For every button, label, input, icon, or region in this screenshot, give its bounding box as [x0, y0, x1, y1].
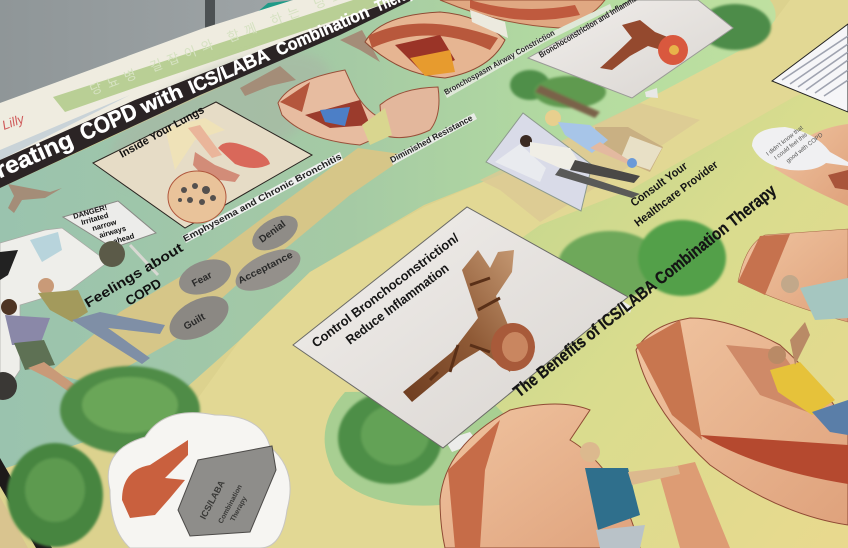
- lung: top right: [774, 124, 848, 206]
- icon: doctor standing: [520, 135, 640, 198]
- title text: [0, 0, 424, 189]
- speech bubble: good with COPD: [786, 132, 825, 165]
- woman: [1, 299, 82, 394]
- danger sign: ahead: [112, 231, 136, 246]
- tree: behind top sign, right: [699, 4, 771, 50]
- icon: airway tube: [403, 250, 535, 402]
- danger sign: [63, 201, 158, 275]
- sign: inside your lungs: [93, 102, 312, 228]
- lung: right middle with man: [738, 229, 848, 322]
- speech bubble: I didn't know that: [766, 125, 805, 158]
- danger sign: airways: [98, 224, 127, 240]
- title banner: [0, 0, 424, 189]
- rock: guilt: Guilt: [182, 311, 208, 333]
- title text: ICS/LABA: [186, 45, 273, 99]
- sign heading: Control Bronchoconstriction/: [309, 230, 462, 350]
- icon: padlock: [178, 446, 276, 536]
- speech bubble: I could feel this: [774, 132, 809, 162]
- caption: consult your healthcare provider: Consult Your: [629, 160, 690, 209]
- icon: padlock: Therapy: [230, 496, 249, 523]
- sign heading: Reduce Inflammation: [343, 260, 452, 347]
- rock: fear: [174, 253, 236, 301]
- sofa: [595, 127, 663, 172]
- caption: bronchospasm airway constriction: [443, 4, 612, 98]
- trees: bushes right of big sign: [558, 220, 726, 299]
- trees: bottom left: [7, 366, 200, 547]
- logo: Lilly: Lilly: [0, 111, 27, 133]
- ground: meadow around big sign: [325, 390, 520, 506]
- sign: bronchoconstriction and inflammation: [528, 0, 733, 98]
- lungs: upper cluster with bands: [365, 0, 605, 78]
- icon: patient on sofa: [545, 110, 637, 168]
- lungs: diminished resistance cluster: [278, 70, 439, 145]
- sign heading: Inside Your Lungs: [118, 104, 206, 161]
- caption: bronchospasm airway constriction: Bronchospasm Airway Constriction: [443, 28, 556, 97]
- big sign: control bronchoconstriction: [293, 207, 632, 452]
- icon: person in yellow shirt: [768, 322, 848, 435]
- lung: large right: [636, 318, 848, 525]
- rock: guilt: [162, 287, 236, 349]
- icon: coiled airway: [122, 440, 188, 518]
- man: [38, 278, 165, 364]
- rocks: stages of feelings: [162, 208, 306, 349]
- speech bubble: [752, 125, 848, 170]
- icon: padlock: ICS/LABA: [198, 478, 227, 521]
- text panel: top right: [772, 24, 848, 112]
- danger sign: DANGER!: [72, 203, 108, 221]
- ground: lower right meadow: [470, 75, 848, 548]
- tree: behind top sign, left: [510, 70, 606, 118]
- rock: acceptance: Acceptance: [236, 250, 295, 287]
- danger sign: Irritated: [80, 210, 110, 227]
- title text: with: [136, 81, 186, 119]
- rock: denial: [246, 208, 304, 258]
- van: [0, 228, 125, 400]
- ground: upper teal and green meadow: [0, 0, 776, 470]
- poster header strip: [0, 0, 410, 165]
- feelings about copd heading: COPD: [123, 275, 164, 309]
- sign: consult your healthcare provider: [486, 110, 663, 211]
- rock: acceptance: [230, 241, 306, 299]
- airway illustration: [600, 20, 688, 70]
- rock: fear: Fear: [190, 270, 214, 290]
- title text: COPD: [76, 98, 141, 146]
- danger sign: narrow: [91, 217, 118, 233]
- caption: emphysema and chronic bronchitis: Emphysema and Chronic Bronchitis: [181, 151, 343, 244]
- lung illustration: [168, 125, 270, 223]
- tree: bush left of big sign: [338, 392, 442, 484]
- bottom-left poster corner: [0, 458, 52, 548]
- icon: person in teal vest: [580, 442, 680, 548]
- rock: denial: Denial: [257, 219, 288, 245]
- title text: Combination: [273, 2, 372, 60]
- lung: large bottom: [440, 404, 730, 548]
- tree trunks: upper left: [8, 30, 380, 213]
- caption: consult your healthcare provider: Healthcare Provider: [633, 159, 721, 229]
- callout: ics/laba lock cloud: [108, 413, 290, 548]
- icon: padlock: Combination: [218, 484, 244, 525]
- people: couple by the van: [1, 278, 165, 394]
- caption: diminished resistance: Diminished Resistance: [388, 113, 474, 165]
- feelings about copd heading: Feelings about: [82, 240, 186, 311]
- heading: the benefits: The Benefits of ICS/LABA Combination Therapy: [510, 181, 780, 401]
- icon: person in green: [781, 275, 848, 320]
